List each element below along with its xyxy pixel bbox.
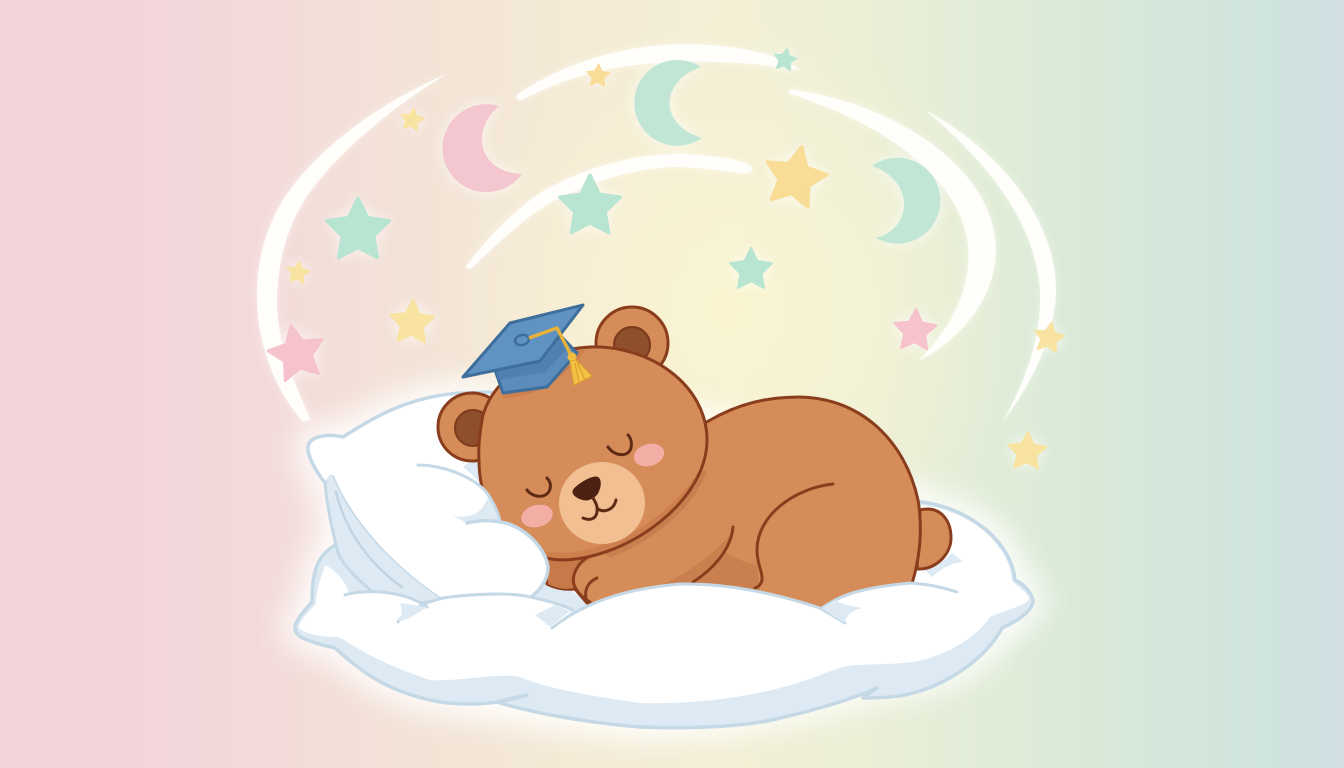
mouth xyxy=(583,498,616,519)
graduation cap xyxy=(463,305,592,393)
stars xyxy=(264,46,1067,469)
closed eyes xyxy=(527,435,631,496)
tassel xyxy=(529,328,592,385)
cloud bed, front puffs xyxy=(316,583,960,695)
white swooshes xyxy=(257,44,1056,422)
body shadows xyxy=(547,556,590,589)
right ear xyxy=(596,307,668,379)
left ear xyxy=(438,393,506,461)
bear body xyxy=(547,397,920,620)
pillow xyxy=(308,392,600,640)
bear leg line xyxy=(755,484,833,588)
pillow front folds xyxy=(390,465,548,602)
soft white halo around bear and cloud xyxy=(295,393,1033,727)
muzzle xyxy=(559,462,645,544)
bear head xyxy=(479,347,707,560)
cloud bed, back layer xyxy=(295,500,1033,728)
nose xyxy=(573,477,600,500)
bear arm line xyxy=(693,527,733,582)
bear xyxy=(438,307,951,620)
cloud outlines xyxy=(345,583,957,628)
crescent moons xyxy=(442,60,940,244)
bear tail xyxy=(917,509,951,569)
cap button xyxy=(514,333,530,347)
cap board xyxy=(463,305,583,377)
bear paw xyxy=(573,553,650,606)
head shading xyxy=(503,350,698,558)
cap base xyxy=(495,333,577,393)
cheeks xyxy=(519,440,667,531)
